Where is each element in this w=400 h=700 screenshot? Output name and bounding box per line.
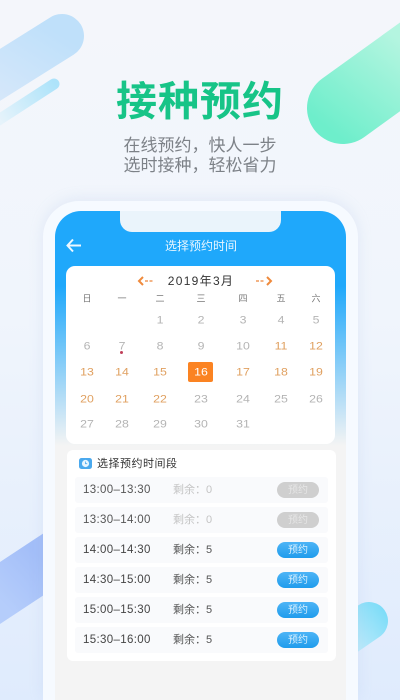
time slot row 4: 剩余：5	[173, 574, 212, 586]
panel: time slots	[67, 450, 336, 661]
weekday headers: 六	[311, 294, 321, 304]
time slot row 4: 预约	[288, 575, 308, 586]
time slot row 3: 剩余：5	[173, 544, 212, 556]
calendar dates: 22	[153, 394, 167, 406]
icon: previous month arrow	[138, 276, 152, 286]
time slot row 5: 预约	[288, 605, 308, 616]
time slot row 5: 剩余：5	[173, 604, 212, 616]
calendar dates: 5	[313, 314, 319, 326]
calendar dates: 8	[157, 340, 163, 352]
calendar dates: 4	[278, 314, 284, 326]
time slot row 1: 预约	[288, 485, 308, 496]
screen header title: 选择预约时间	[165, 239, 237, 253]
weekday headers	[82, 294, 321, 304]
calendar dates: 1	[157, 314, 163, 326]
weekday headers: 二	[155, 294, 165, 304]
phone frame	[43, 201, 358, 700]
calendar dates: 13	[80, 366, 94, 378]
month heading: 2019年3月	[168, 274, 234, 288]
calendar dates: 26	[309, 394, 323, 406]
weekday headers: 一	[117, 294, 127, 304]
calendar dates: 14	[115, 366, 129, 378]
calendar dates: 6	[84, 340, 90, 352]
time slot row 2: 13:30–14:00	[83, 514, 151, 526]
calendar dates: 9	[198, 340, 204, 352]
weekday headers: 五	[276, 294, 286, 304]
subtitle: 选时接种，轻松省力	[124, 156, 276, 175]
calendar dates: 29	[153, 418, 167, 430]
calendar dates: 20	[80, 394, 94, 406]
time slot row 6: 剩余：5	[173, 634, 212, 646]
weekday headers: 三	[196, 294, 206, 304]
time slot row 1: 13:00–13:30	[83, 484, 151, 496]
calendar dates: 2	[198, 314, 204, 326]
calendar dates: 16	[194, 366, 208, 378]
calendar dates: 3	[240, 314, 246, 326]
calendar dates: 18	[274, 366, 288, 378]
calendar dates: 7	[119, 340, 125, 352]
time slot row 3	[75, 537, 328, 563]
time slots heading: 选择预约时间段	[97, 458, 178, 470]
panel: calendar	[66, 266, 335, 444]
time slot row 4: 14:30–15:00	[83, 574, 151, 586]
calendar dates	[80, 314, 323, 430]
calendar dates: 12	[309, 340, 323, 352]
calendar dates: 23	[194, 394, 208, 406]
time slot row 6: 15:30–16:00	[83, 634, 151, 646]
calendar dates: 19	[309, 366, 323, 378]
icon: next month arrow	[256, 276, 272, 286]
calendar dates: 21	[115, 394, 129, 406]
calendar dates: 30	[194, 418, 208, 430]
phone screen	[55, 211, 346, 700]
weekday headers: 四	[238, 294, 248, 304]
calendar dates: 10	[236, 340, 250, 352]
icon: clock	[79, 458, 92, 469]
calendar dates: 25	[274, 394, 288, 406]
calendar dates: 31	[236, 418, 250, 430]
calendar dates: 28	[115, 418, 129, 430]
calendar dates: 17	[236, 366, 250, 378]
time slot row 1: 剩余：0	[173, 484, 212, 496]
time slot row 5: 15:00–15:30	[83, 604, 151, 616]
weekday headers: 日	[82, 294, 92, 304]
subtitle: 在线预约，快人一步	[124, 136, 276, 155]
time slot row 3: 14:00–14:30	[83, 544, 151, 556]
time slot row 6	[75, 627, 328, 653]
time slot row 2	[75, 507, 328, 533]
calendar dates: 27	[80, 418, 94, 430]
time slot row 1	[75, 477, 328, 503]
time slot row 6: 预约	[288, 635, 308, 646]
calendar dates: 11	[275, 340, 287, 352]
subtitle	[124, 136, 276, 175]
time slot row 4	[75, 567, 328, 593]
icon: back arrow	[66, 238, 81, 252]
phone notch	[120, 211, 281, 232]
time slot row 3: 预约	[288, 545, 308, 556]
title: 接种预约	[116, 78, 284, 124]
calendar dates: 15	[153, 366, 167, 378]
time slot row 5	[75, 597, 328, 623]
time slot row 2: 预约	[288, 515, 308, 526]
time slot row 2: 剩余：0	[173, 514, 212, 526]
calendar dates: 24	[236, 394, 250, 406]
